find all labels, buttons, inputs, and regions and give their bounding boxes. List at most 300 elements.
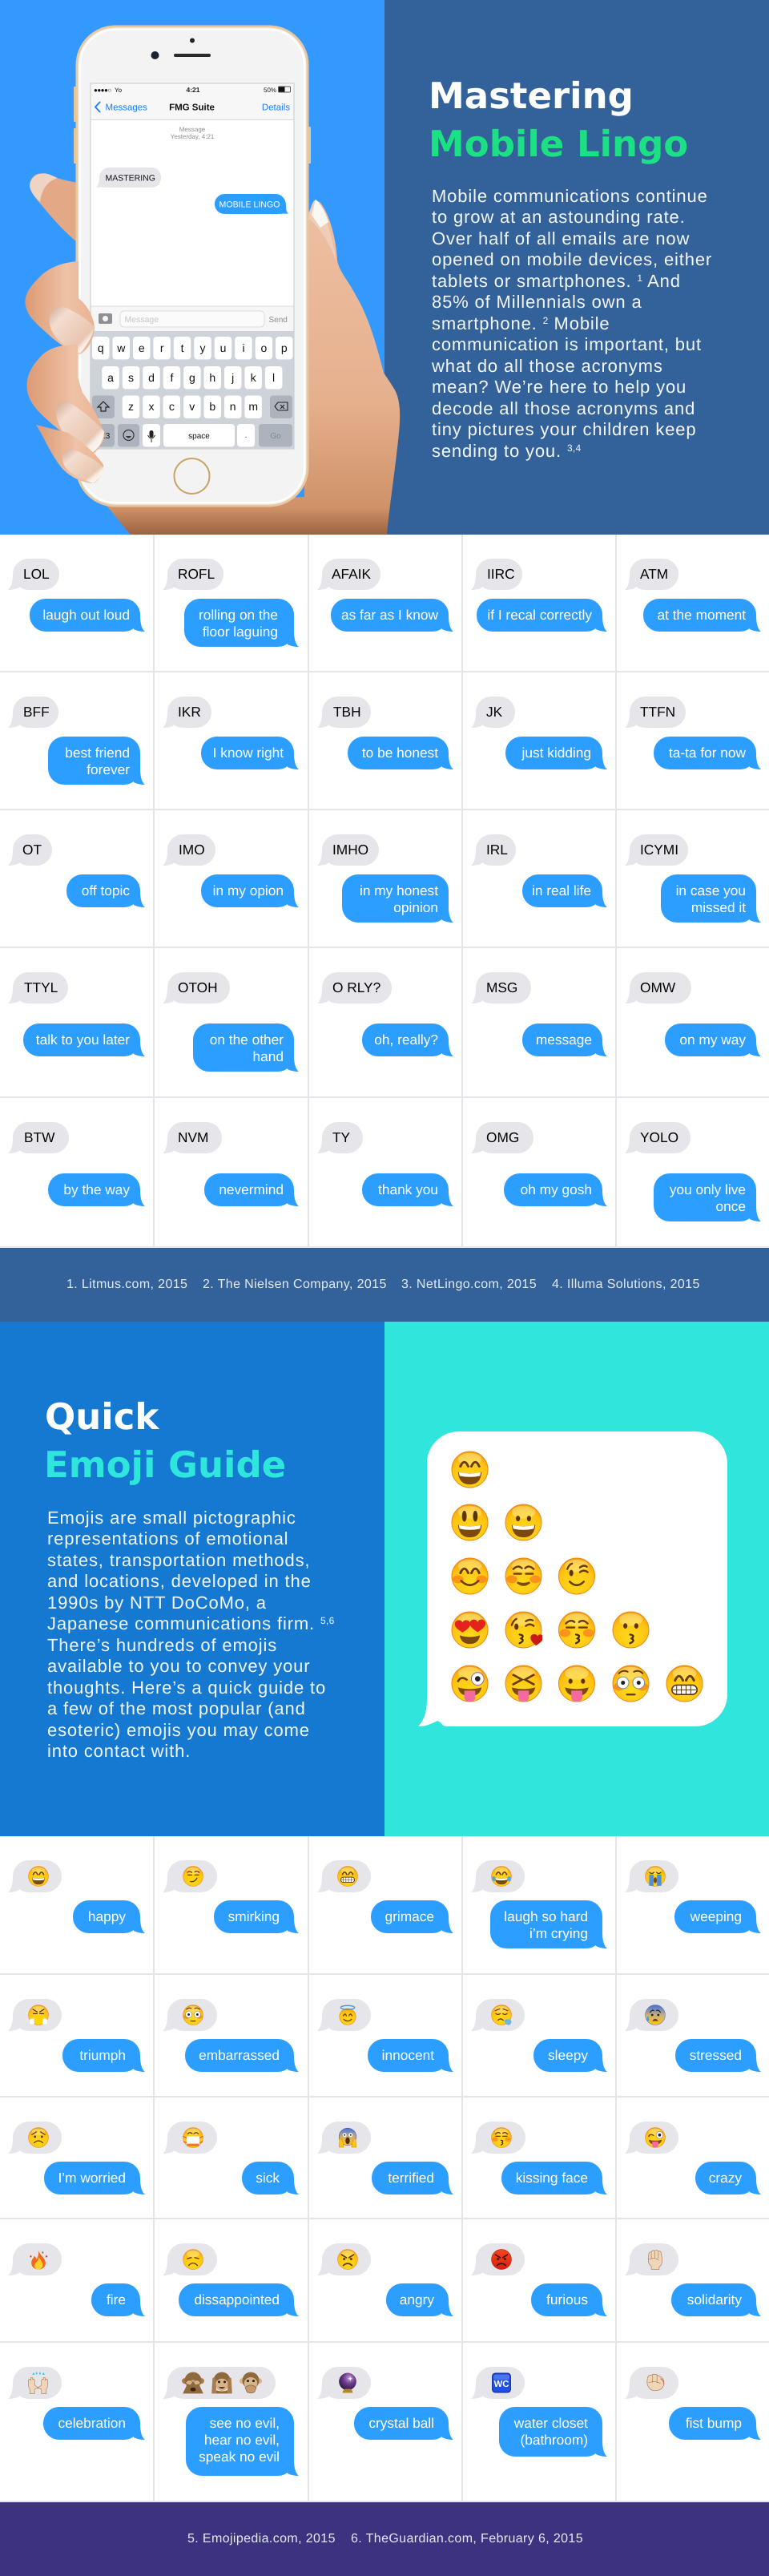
bubble: rolling on the floor laguing: floor laguing: [203, 624, 278, 640]
bubble: TY: [322, 1122, 363, 1153]
cell: LOL: [8, 559, 145, 632]
text block: hero intro: what do all those acronyms: [432, 356, 663, 375]
cell: BTW: [8, 1122, 145, 1206]
bubble: furious emoji: [476, 2243, 525, 2275]
bubble: ta-ta for now: ta-ta for now: [669, 745, 746, 761]
text block: hero intro: sending to you. 3,4: [432, 441, 582, 460]
bubble: in my opion: in my opion: [213, 882, 284, 898]
bubble: off topic: off topic: [82, 882, 130, 898]
keyboard: w: [116, 341, 126, 354]
bubble: on the other hand: hand: [253, 1048, 284, 1064]
left finger three: [26, 345, 105, 453]
bubble: IMHO: IMHO: [332, 842, 368, 858]
panel: sources footer 5-6: [0, 2502, 769, 2576]
bubble: sick emoji: [167, 2122, 217, 2154]
bubble: in case you missed it: in case you: [676, 882, 746, 898]
bubble: thank you: [362, 1173, 449, 1206]
bubble: see no evil, hear no evil, speak no evil: speak no evil: [199, 2449, 280, 2465]
bubble: IIRC: [476, 559, 522, 590]
bubble: stressed emoji: [630, 1999, 678, 2031]
text block: emoji intro: thoughts. Here’s a quick guide to: [47, 1677, 326, 1698]
keyboard: z: [128, 400, 134, 413]
bubble: oh my gosh: [504, 1173, 602, 1206]
cell: innocent: [317, 1999, 453, 2072]
text block: hero intro: [432, 186, 712, 461]
bubble: in case you missed it: missed it: [691, 899, 746, 915]
bubble: fire emoji: [13, 2243, 62, 2275]
bubble: YOLO: [630, 1122, 690, 1153]
bubble: AFAIK: [322, 559, 380, 590]
bubble: stressed: stressed: [690, 2047, 742, 2063]
bubble: sick: [242, 2162, 294, 2194]
bubble: kissing face emoji: [476, 2122, 525, 2154]
keyboard: n: [230, 400, 236, 413]
bubble: oh my gosh: oh my gosh: [521, 1181, 592, 1197]
bubble: solidarity: [671, 2283, 756, 2316]
source 6: 6. TheGuardian.com, February 6, 2015: [351, 2532, 583, 2546]
bubble: MSG: MSG: [486, 979, 517, 995]
cell: grimace: [317, 1860, 453, 1933]
bubble: O RLY?: [322, 972, 392, 1003]
text block: emoji intro: into contact with.: [47, 1741, 191, 1761]
bubble: rolling on the floor laguing: rolling on the: [199, 607, 278, 623]
cell: TY: [317, 1122, 453, 1206]
bubble: crazy emoji: [630, 2122, 678, 2154]
bubble: ROFL: [167, 559, 223, 590]
bubble: water closet (bathroom): water closet: [514, 2415, 588, 2431]
bubble: as far as I know: as far as I know: [341, 607, 438, 623]
bubble: if I recal correctly: [477, 599, 602, 632]
cell: crystal ball: [309, 2343, 461, 2501]
bubble: in my honest opinion: [342, 874, 449, 923]
cell: weeping: [625, 1860, 761, 1933]
cell: dissappointed: [155, 2219, 307, 2341]
bubble: IMO: [167, 834, 215, 866]
panel: emoji guide intro: [0, 1322, 384, 1836]
bubble: AFAIK: AFAIK: [332, 566, 371, 582]
bubble: IKR: [167, 696, 211, 728]
bubble: IIRC: IIRC: [487, 566, 515, 582]
bubble: laugh so hard i'm crying: [490, 1900, 602, 1948]
bubble: furious: furious: [546, 2291, 588, 2307]
cell: TTFN: [625, 696, 761, 769]
text block: hero intro: mean? We’re here to help you: [432, 377, 686, 397]
message bubble: MOBILE LINGO: MOBILE LINGO: [219, 200, 280, 210]
bubble: triumph emoji: [13, 1999, 62, 2031]
bubble: celebration: celebration: [58, 2415, 126, 2431]
bubble: off topic: [66, 874, 140, 907]
keyboard: u: [220, 341, 226, 354]
cell: TTYL: [8, 972, 145, 1056]
text block: emoji intro: Emojis are small pictographic: [47, 1507, 296, 1528]
bubble: furious: [531, 2283, 602, 2316]
panel: emoji speech bubble on teal: [384, 1322, 769, 1836]
navigation bar: FMG Suite: [169, 103, 215, 112]
bubble: IMO: IMO: [179, 842, 205, 858]
bubble: I know right: I know right: [213, 745, 284, 761]
keyboard: a: [107, 371, 114, 384]
bubble: talk to you later: [23, 1024, 140, 1056]
cell: I'm worried: [0, 2098, 153, 2218]
bubble: TY: TY: [332, 1129, 350, 1145]
bubble: angry: angry: [400, 2291, 434, 2307]
text block: hero intro: tiny pictures your children keep: [432, 419, 696, 439]
emoji row 1: [452, 1452, 488, 1488]
bubble: IKR: IKR: [178, 704, 201, 720]
cell: happy: [8, 1860, 145, 1933]
bubble: just kidding: [505, 737, 602, 769]
cell: angry: [309, 2219, 461, 2341]
top fingernail: [30, 173, 58, 202]
bubble: at the moment: at the moment: [658, 607, 746, 623]
heading: Emoji Guide: Emoji Guide: [44, 1443, 286, 1486]
bubble: on the other hand: on the other: [210, 1032, 284, 1048]
keyboard: 123: [97, 432, 111, 441]
bubble: TTYL: [13, 972, 68, 1003]
emoji row 4: [452, 1612, 649, 1648]
bubble: sleepy: sleepy: [548, 2047, 588, 2063]
bubble: see no evil, hear no evil, speak no evil: [186, 2407, 294, 2476]
bubble: fire: fire: [107, 2291, 126, 2307]
bubble: weeping emoji: [630, 1860, 678, 1892]
bubble: crystal ball emoji: [322, 2367, 371, 2399]
bubble: BTW: [13, 1122, 69, 1153]
cell: embarrassed: [163, 1999, 299, 2072]
bubble: angry: [386, 2283, 449, 2316]
keyboard: [91, 331, 293, 449]
status bar: [94, 86, 290, 94]
bubble: on my way: [665, 1024, 756, 1056]
keyboard: c: [169, 400, 175, 413]
bubble: grimace emoji: [322, 1860, 371, 1892]
keyboard: k: [251, 371, 257, 384]
navigation bar: Details: [262, 103, 290, 112]
bubble: by the way: by the way: [63, 1181, 130, 1197]
bubble: happy: [73, 1900, 140, 1933]
left finger two: [25, 261, 95, 354]
cell: water closet: [463, 2343, 615, 2501]
bubble: in my opion: [201, 874, 294, 907]
keyboard: v: [189, 400, 195, 413]
source 4: 4. Illuma Solutions, 2015: [552, 1278, 700, 1291]
bubble: terrified: terrified: [388, 2170, 434, 2186]
text block: hero intro: tablets or smartphones. 1 And: [432, 271, 681, 290]
keyboard: b: [209, 400, 215, 413]
cell: YOLO: [625, 1122, 761, 1221]
text block: hero intro: Over half of all emails are now: [432, 228, 690, 248]
phone body: [74, 26, 311, 506]
bubble: terrified: [372, 2162, 449, 2194]
emoji row 2: [452, 1504, 542, 1540]
text block: hero intro: to grow at an astounding rate.: [432, 207, 686, 227]
bubble: embarrassed: [185, 2039, 294, 2072]
bubble: disappointed emoji: [167, 2243, 217, 2275]
message timestamp: Message: [179, 126, 206, 133]
bubble: TTYL: TTYL: [24, 979, 58, 995]
keyboard: x: [149, 400, 154, 413]
cell: ROFL: [163, 559, 299, 647]
cell: OTOH: [163, 972, 299, 1072]
text block: hero intro: communication is important, but: [432, 334, 702, 354]
bubble: crazy: [695, 2162, 756, 2194]
cell: solidarity: [617, 2219, 769, 2341]
bubble: O RLY?: O RLY?: [332, 979, 380, 995]
message input bar: Send: [269, 316, 288, 325]
bubble: TTFN: TTFN: [640, 704, 675, 720]
keyboard: s: [128, 371, 134, 384]
keyboard: h: [209, 371, 215, 384]
navigation bar: [95, 102, 290, 112]
cell: BFF: [8, 696, 145, 785]
bubble: thank you: thank you: [378, 1181, 438, 1197]
bubble: OTOH: [167, 972, 230, 1003]
bubble: ICYMI: ICYMI: [640, 842, 678, 858]
panel: hero illustration of a hand holding a phone: [0, 0, 769, 535]
bubble: kissing face: kissing face: [516, 2170, 588, 2186]
bubble: water closet (bathroom): [499, 2407, 602, 2457]
bubble: best friend forever: [48, 737, 140, 785]
keyboard: r: [160, 341, 164, 354]
bubble: ROFL: ROFL: [178, 566, 215, 582]
bubble: MSG: [476, 972, 531, 1003]
bubble: kissing face: [501, 2162, 602, 2194]
bubble: OMW: [630, 972, 691, 1003]
bubble: stressed: [675, 2039, 756, 2072]
bubble: ICYMI: [630, 834, 688, 866]
bubble: embarrassed emoji: [167, 1999, 217, 2031]
bubble: angry emoji: [322, 2243, 371, 2275]
bubble: BTW: BTW: [24, 1129, 54, 1145]
bubble: on the other hand: [193, 1024, 294, 1072]
message bubble: MASTERING: [96, 168, 161, 188]
cell: fist bump: [617, 2343, 769, 2501]
bubble: on my way: on my way: [679, 1032, 746, 1048]
bubble: at the moment: [643, 599, 756, 632]
cell: ICYMI: [625, 834, 761, 923]
bubble: see no evil, hear no evil, speak no evil: see no evil,: [210, 2415, 280, 2431]
bubble: IRL: IRL: [486, 842, 508, 858]
bubble: NVM: [167, 1122, 222, 1153]
message timestamp: Yesterday, 4:21: [171, 133, 215, 140]
text block: emoji intro: and locations, developed in the: [47, 1571, 312, 1591]
bubble: I know right: [201, 737, 294, 769]
bubble: OMG: [476, 1122, 533, 1153]
phone screen: [91, 83, 294, 449]
bubble: happy emoji: [13, 1860, 62, 1892]
bubble: I'm worried: I’m worried: [58, 2170, 126, 2186]
bubble: tears of joy emoji: [476, 1860, 525, 1892]
bubble: laugh so hard i'm crying: laugh so hard: [504, 1908, 588, 1924]
text block: emoji intro: a few of the most popular (and: [47, 1698, 306, 1718]
text block: hero intro: 85% of Millennials own a: [432, 292, 642, 312]
bubble: laugh so hard i'm crying: i’m crying: [529, 1925, 588, 1941]
panel: emoji grid: [8, 1860, 761, 2476]
bubble: ta-ta for now: [654, 737, 756, 769]
keyboard: g: [189, 371, 195, 384]
right fingernail: [308, 200, 336, 261]
bubble: just kidding: just kidding: [522, 745, 591, 761]
keyboard: f: [170, 371, 173, 384]
keyboard: d: [148, 371, 155, 384]
cell: celebration: [0, 2343, 153, 2501]
bubble: by the way: [48, 1173, 140, 1206]
keyboard: i: [242, 341, 245, 354]
large white speech bubble: [418, 1431, 727, 1726]
source 5: 5. Emojipedia.com, 2015: [187, 2532, 336, 2546]
bubble: raised fist emoji: [630, 2243, 678, 2275]
bubble: BFF: BFF: [23, 704, 50, 720]
text block: emoji intro: There’s hundreds of emojis: [47, 1635, 277, 1654]
cell: triumph: [8, 1999, 145, 2072]
message timestamp: [171, 126, 215, 140]
bubble: fire: [91, 2283, 140, 2316]
bubble: fist bump: fist bump: [686, 2415, 742, 2431]
bubble: oh, really?: [362, 1024, 449, 1056]
bubble: crystal ball: crystal ball: [368, 2415, 434, 2431]
text block: hero intro: Mobile communications continue: [432, 186, 708, 205]
cell: TBH: [317, 696, 453, 769]
bubble: terrified emoji: [322, 2122, 371, 2154]
panel: acronym grid: [8, 559, 761, 1221]
text block: emoji intro: esoteric) emojis you may come: [47, 1720, 310, 1739]
bubble: laugh out loud: laugh out loud: [42, 607, 130, 623]
cell: terrified: [309, 2098, 461, 2218]
bubble: smirking: [214, 1900, 294, 1933]
bubble: weeping: weeping: [690, 1908, 742, 1924]
bubble: TBH: [322, 696, 371, 728]
bubble: message: [522, 1024, 602, 1056]
status bar: 50%: [264, 87, 276, 94]
message bubble: MOBILE LINGO: [215, 194, 288, 214]
bubble: BFF: [13, 696, 58, 728]
bubble: laugh out loud: [30, 599, 140, 632]
heading: Quick: Quick: [45, 1395, 159, 1438]
keyboard: o: [261, 341, 268, 354]
bubble: dissappointed: [179, 2283, 294, 2316]
keyboard: Go: [270, 432, 281, 441]
hand palm behind phone: [107, 201, 400, 535]
bubble: innocent emoji: [322, 1999, 371, 2031]
cell: OMW: [625, 972, 761, 1056]
cell: sleepy: [471, 1999, 607, 2072]
cell: IMHO: [317, 834, 453, 923]
keyboard: q: [98, 341, 104, 354]
bubble: OMG: OMG: [486, 1129, 519, 1145]
keyboard: m: [248, 400, 258, 413]
emoji row 3: [452, 1558, 595, 1594]
bubble: OT: OT: [22, 842, 42, 858]
text block: emoji intro: 1990s by NTT DoCoMo, a: [47, 1592, 267, 1613]
cell: smirking: [163, 1860, 299, 1933]
bubble: triumph: [62, 2039, 140, 2072]
bubble: crystal ball: [354, 2407, 449, 2440]
text block: emoji intro: Japanese communications firm. 5,6: [47, 1613, 335, 1633]
keyboard: e: [139, 341, 145, 354]
bubble: smirking: smirking: [228, 1908, 280, 1924]
bubble: in case you missed it: [661, 874, 756, 923]
bubble: if I recal correctly: if I recal correctly: [487, 607, 592, 623]
bubble: NVM: NVM: [178, 1129, 208, 1145]
cell: O RLY?: [317, 972, 453, 1056]
text block: emoji intro: states, transportation methods,: [47, 1550, 310, 1569]
text block: emoji intro: [47, 1507, 335, 1761]
cell: kissing face: [463, 2098, 615, 2218]
status bar: ●●●●○: [94, 87, 111, 94]
bubble: fist bump: [669, 2407, 756, 2440]
bubble: solidarity: solidarity: [687, 2291, 742, 2307]
heading: Mobile Lingo: Mobile Lingo: [429, 122, 688, 165]
bubble: ATM: ATM: [640, 566, 668, 582]
bubble: embarrassed: embarrassed: [199, 2047, 280, 2063]
bubble: you only live once: you only live: [670, 1181, 746, 1197]
bubble: OT: [13, 834, 52, 866]
keyboard: j: [231, 371, 234, 384]
bubble: worried emoji: [13, 2122, 62, 2154]
bubble: in real life: [522, 874, 602, 907]
emoji row 5: [452, 1666, 703, 1702]
bubble: best friend forever: best friend: [65, 745, 130, 761]
bubble: oh, really?: oh, really?: [374, 1032, 438, 1048]
keyboard: p: [281, 341, 288, 354]
bubble: fist bump emoji: [630, 2367, 678, 2399]
keyboard: .: [245, 431, 247, 440]
bubble: OTOH: OTOH: [178, 979, 218, 995]
bubble: YOLO: YOLO: [640, 1129, 678, 1145]
panel: sources footer 1-4: [0, 1248, 769, 1322]
cell: IMO: [163, 834, 299, 907]
text block: hero intro: decode all those acronyms and: [432, 398, 695, 418]
source 1: 1. Litmus.com, 2015: [66, 1278, 187, 1291]
bubble: in my honest opinion: in my honest: [360, 882, 438, 898]
cell: IKR: [163, 696, 299, 769]
bubble: water closet (bathroom): (bathroom): [520, 2432, 588, 2448]
cell: ATM: [625, 559, 761, 632]
text block: hero intro: smartphone. 2 Mobile: [432, 313, 610, 333]
cell: MSG: [471, 972, 607, 1056]
bubble: innocent: innocent: [382, 2047, 434, 2063]
bubble: grimace: grimace: [385, 1908, 434, 1924]
bubble: nevermind: nevermind: [219, 1181, 284, 1197]
message input bar: Message: [125, 315, 159, 325]
bubble: dissappointed: dissappointed: [194, 2291, 280, 2307]
bubble: triumph: triumph: [79, 2047, 126, 2063]
cell: furious: [463, 2219, 615, 2341]
bubble: celebration: [43, 2407, 140, 2440]
navigation bar: Messages: [106, 103, 147, 112]
bubble: you only live once: once: [716, 1198, 746, 1214]
bubble: grimace: [371, 1900, 449, 1933]
keyboard: t: [181, 341, 184, 354]
bubble: raised hands emoji: [13, 2367, 62, 2399]
cell: crazy: [617, 2098, 769, 2218]
bubble: as far as I know: [331, 599, 449, 632]
message input bar: [91, 306, 294, 331]
bubble: innocent: [368, 2039, 449, 2072]
bubble: message: message: [536, 1032, 592, 1048]
bubble: smirking emoji: [167, 1860, 217, 1892]
bubble: three monkeys emoji: [167, 2367, 276, 2399]
keyboard: l: [272, 371, 275, 384]
cell: see no evil: [155, 2343, 307, 2501]
text block: emoji intro: representations of emotional: [47, 1528, 288, 1548]
bubble: ATM: [630, 559, 678, 590]
source 2: 2. The Nielsen Company, 2015: [203, 1278, 387, 1291]
bubble: IMHO: [322, 834, 379, 866]
cell: sick: [155, 2098, 307, 2218]
cell: stressed: [617, 1975, 769, 2096]
bubble: sick: sick: [256, 2170, 280, 2186]
bubble: TTFN: [630, 696, 686, 728]
